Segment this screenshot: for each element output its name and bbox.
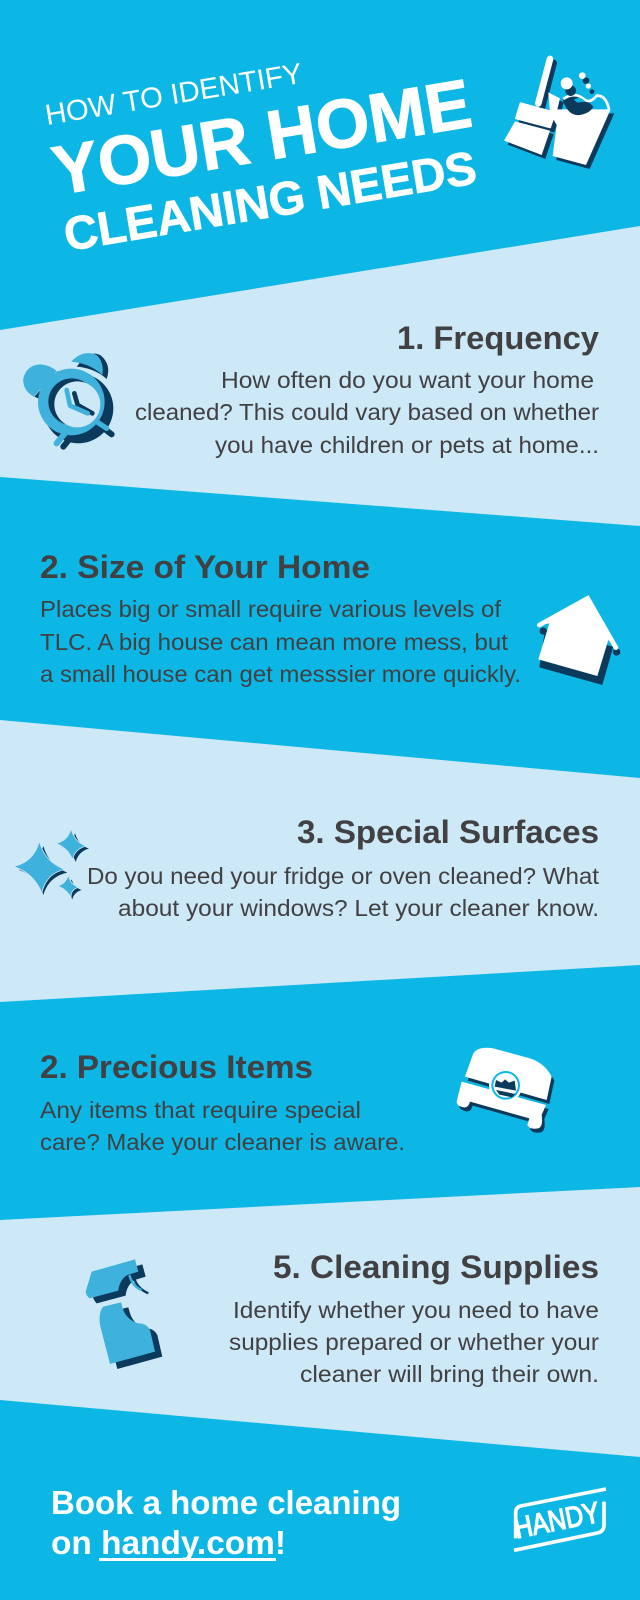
heading: precious items: 2. Precious Items bbox=[40, 1049, 313, 1085]
band: cleaning supplies background bbox=[0, 1187, 640, 1457]
icon: broom and bucket bbox=[504, 59, 614, 169]
panel: special surfaces bbox=[0, 720, 640, 1002]
text: precious items body: care? Make your cleaner is aware. bbox=[40, 1129, 405, 1155]
heading: size of your home: 2. Size of Your Home bbox=[40, 549, 370, 585]
band: special surfaces background bbox=[0, 720, 640, 1002]
icon: alarm clock bbox=[23, 353, 113, 447]
title line 2: YOUR HOME bbox=[47, 65, 477, 210]
title bbox=[43, 58, 480, 261]
text: frequency body: cleaned? This could vary based on whether bbox=[135, 399, 599, 425]
text: cleaning supplies body: Identify whether you need to have bbox=[233, 1297, 599, 1323]
text: size body: a small house can get messsier more quickly. bbox=[40, 661, 521, 687]
text: special surfaces body: about your windows? Let your cleaner know. bbox=[118, 895, 599, 921]
panel: size of your home bbox=[40, 549, 620, 687]
title line 3: CLEANING NEEDS bbox=[60, 140, 480, 261]
text: frequency body: How often do you want your home bbox=[221, 367, 594, 393]
icon: couch bbox=[457, 1048, 554, 1133]
call to action: Book a home cleaning bbox=[51, 1484, 401, 1521]
text: cleaning supplies body: cleaner will bring their own. bbox=[300, 1361, 599, 1387]
call to action bbox=[51, 1484, 401, 1561]
heading: cleaning supplies: 5. Cleaning Supplies bbox=[273, 1249, 599, 1285]
text: size body bbox=[40, 596, 521, 687]
icon: house bbox=[538, 597, 620, 685]
text: size body: Places big or small require various levels of bbox=[40, 596, 502, 622]
heading: frequency: 1. Frequency bbox=[397, 320, 599, 356]
icon: sparkles bbox=[15, 830, 89, 899]
logo: handy: HANDY bbox=[512, 1496, 602, 1545]
heading: special surfaces: 3. Special Surfaces bbox=[297, 814, 599, 850]
panel: cleaning supplies bbox=[0, 1187, 640, 1457]
icon: spray bottle bbox=[86, 1259, 162, 1369]
text: size body: TLC. A big house can mean more mess, but bbox=[40, 629, 509, 655]
panel: frequency bbox=[0, 226, 640, 526]
text: precious items body bbox=[40, 1097, 405, 1155]
call to action: on handy.com! bbox=[51, 1524, 286, 1561]
title line 1: HOW TO IDENTIFY bbox=[43, 58, 305, 132]
text: cleaning supplies body bbox=[229, 1297, 599, 1387]
text: frequency body bbox=[135, 367, 599, 458]
band: frequency background bbox=[0, 226, 640, 526]
panel: precious items bbox=[40, 1048, 554, 1155]
text: cleaning supplies body: supplies prepared or whether your bbox=[229, 1329, 599, 1355]
text: special surfaces body bbox=[87, 863, 600, 921]
text: frequency body: you have children or pets at home... bbox=[215, 432, 599, 458]
text: precious items body: Any items that require special bbox=[40, 1097, 361, 1123]
text: special surfaces body: Do you need your fridge or oven cleaned? What bbox=[87, 863, 600, 889]
